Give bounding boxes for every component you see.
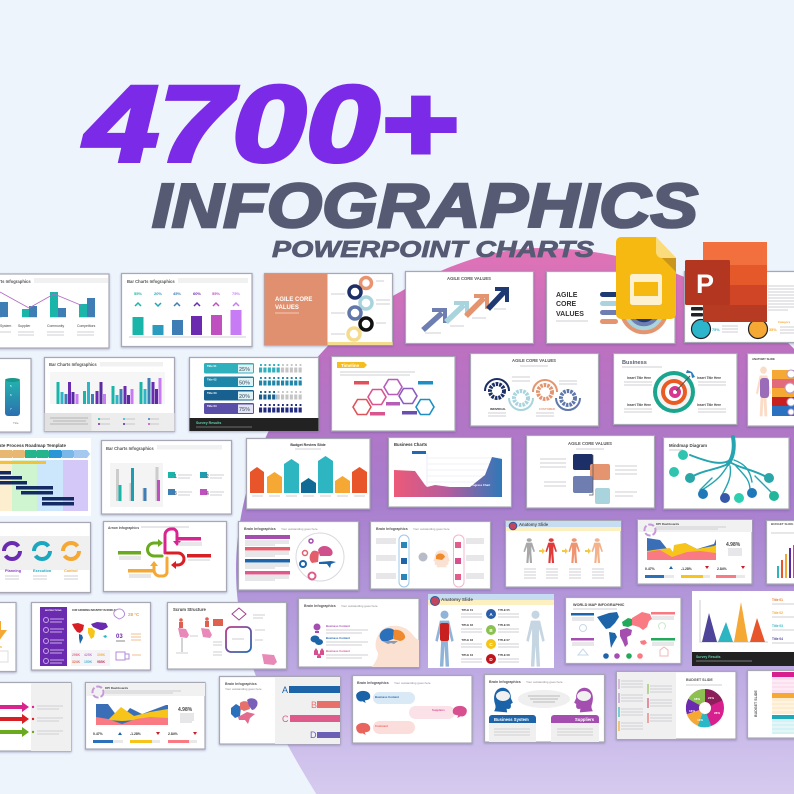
footer band <box>692 652 794 666</box>
card: survey results rows: 50% <box>239 380 250 386</box>
stats: 28 °C <box>128 612 140 617</box>
card: budget donut: 16% <box>689 709 695 713</box>
card: brain head: Brain Infographics <box>304 604 336 608</box>
card: brain A B C D: Your outstanding goes here <box>225 687 262 691</box>
backlogs <box>178 628 277 665</box>
numbered blocks <box>168 472 207 495</box>
card: mindmap <box>664 437 789 509</box>
card: KPI dashboard top <box>638 520 752 584</box>
footer legend <box>44 413 174 431</box>
card: bars with numbered blocks <box>102 440 232 514</box>
card: anatomy full: TITLE 01 <box>461 608 473 612</box>
card: arrow infographics: Arrow Infographics <box>108 526 139 530</box>
bars <box>58 378 160 404</box>
card: rising arrows: AGILE CORE VALUES <box>447 276 491 281</box>
card: KPI dashboard bottom: KPI Dashboards <box>105 686 129 690</box>
card: combo bar chart: Community <box>47 324 64 328</box>
card: target: Insert Title Here <box>697 376 721 380</box>
card: agile core values arcs <box>546 272 675 344</box>
card: brain A B C D: Brain Infographics <box>225 682 257 686</box>
people rows <box>259 365 304 410</box>
card: speech brains: Brain Infographics <box>357 681 389 685</box>
labels <box>354 381 433 416</box>
area chart <box>394 457 502 497</box>
hexagons <box>353 380 434 414</box>
card: agile core values arcs: VALUES <box>556 311 584 318</box>
speech ellipse <box>518 690 570 708</box>
card: target: Business <box>622 360 647 366</box>
brains <box>356 691 467 735</box>
donut <box>692 695 718 721</box>
card: cylinder: 7 <box>10 407 12 411</box>
title <box>83 63 698 262</box>
stats <box>116 612 140 640</box>
percent rows <box>204 363 254 414</box>
card: anatomy row: Anatomy Slide <box>519 522 549 527</box>
card: anatomy full: TITLE 04 <box>461 653 473 657</box>
card: bars with numbered blocks: 3 <box>174 491 177 497</box>
card: anatomy full: Anatomy Slide <box>441 597 473 602</box>
concentric arcs <box>622 310 666 332</box>
card: purple panel world stats: 324K <box>72 660 81 664</box>
card: scrum structure <box>168 602 286 669</box>
card: business area chart: Business Charts <box>394 442 428 447</box>
card: purple panel world stats: 296K <box>72 653 81 657</box>
card: budget donut: BUDGET SLIDE <box>686 678 713 682</box>
card: target: Insert Title Here <box>627 403 651 407</box>
card: connected blocks: AGILE CORE VALUES <box>568 441 612 446</box>
world map <box>72 622 108 644</box>
tree <box>690 437 772 495</box>
ring and brain <box>296 533 344 581</box>
card: KPI dashboard top: 4.98% <box>726 542 741 548</box>
card: survey results rows: Title 03 <box>207 391 217 395</box>
card: brain A B C D <box>220 676 340 744</box>
card: anatomy full: TITLE 06 <box>498 623 510 627</box>
card: agile core values rings: VALUES <box>275 305 299 311</box>
card: purple panel world stats: INSTRUCTIONS <box>45 610 62 612</box>
card: pie percent slide: 75% <box>712 328 720 332</box>
card: brain head: Business Content <box>326 649 350 653</box>
card: triangle survey chart <box>692 591 794 666</box>
side panel <box>40 607 67 666</box>
document bands <box>703 242 767 322</box>
card: purple panel world stats: OUR GROWING INDUSTRY IN WORLD <box>72 609 116 612</box>
card: two heads: Your outstanding goes here <box>413 527 450 531</box>
KPI stats <box>645 567 727 571</box>
card: anatomy full: TITLE 08 <box>498 653 510 657</box>
arrows <box>0 702 29 737</box>
card: anatomy full: D <box>489 657 493 662</box>
card: purple panel world stats: 985K <box>97 660 106 664</box>
card: cylinder: Title <box>13 421 19 425</box>
KPI stats: -1.28% <box>681 567 692 571</box>
letter P: P <box>696 269 714 299</box>
table <box>772 672 794 734</box>
card: budget donut: 11% <box>697 718 703 722</box>
card: orange arrow fragment <box>0 602 16 672</box>
card: world map infographic: WORLD MAP INFOGRAPHIC <box>573 603 625 607</box>
purple background blob <box>236 248 794 794</box>
card: arrow list <box>0 682 71 751</box>
vertical title: BUDGET SLIDE <box>754 690 758 717</box>
KPI stats: 2.84% <box>168 732 178 736</box>
card: target <box>614 354 737 424</box>
list bars <box>245 535 290 574</box>
KPI stats: 0.47% <box>93 732 103 736</box>
KPI stats: -1.28% <box>130 732 141 736</box>
card: connected blocks <box>526 436 654 508</box>
orange panel <box>264 274 328 345</box>
stacked area <box>647 538 716 560</box>
body left <box>435 611 454 667</box>
footer band <box>190 418 318 431</box>
bars <box>0 298 95 317</box>
task bars <box>0 471 74 506</box>
orange pie <box>748 320 768 338</box>
card: KPI dashboard bottom <box>86 682 205 749</box>
card: KPI dashboard top: KPI Dashboards <box>656 522 680 526</box>
headline word: INFOGRAPHICS <box>152 172 698 241</box>
rings <box>348 278 372 340</box>
bars <box>132 310 242 335</box>
card: business system suppliers: Your outstanding goes here <box>526 680 563 684</box>
card: brain A B C D: A <box>282 685 288 695</box>
lettered bars <box>289 686 340 738</box>
world map <box>597 612 652 648</box>
card: agile core values arcs: CORE <box>556 301 577 308</box>
card: survey results rows: Title 02 <box>207 378 217 382</box>
side labels <box>571 612 675 640</box>
card: brain head: Business Content <box>326 636 350 640</box>
card: survey results rows: Title 04 <box>207 404 217 408</box>
card: brain with list: Your outstanding goes here <box>281 527 318 531</box>
card: anatomy organs <box>748 354 794 426</box>
capsules <box>399 535 464 587</box>
card: gears: CUSTOMER <box>539 407 555 411</box>
card: timeline hexagons: Timeline <box>341 363 360 368</box>
chart bars <box>118 467 158 501</box>
card: world map infographic <box>566 598 681 664</box>
scrum loop <box>226 627 251 652</box>
card: scrum structure: Scrum Structure <box>173 607 206 612</box>
bodies <box>523 538 603 563</box>
card: purple panel world stats: 425K <box>84 653 93 657</box>
stacked area <box>96 704 168 725</box>
card: triangle survey chart: Title 03 <box>772 624 783 628</box>
arrows <box>539 548 591 554</box>
card: budget slide bars <box>766 520 794 584</box>
card: survey results rows: Title 01 <box>207 364 217 368</box>
card: bars with numbered blocks: 1 <box>174 474 177 480</box>
card: anatomy full: TITLE 05 <box>498 608 510 612</box>
card: six-bar percent chart: 55% <box>212 291 220 296</box>
card: survey results rows: 20% <box>239 394 250 400</box>
bars <box>778 545 794 578</box>
card: budget donut: 18% <box>694 697 700 701</box>
card: bars with numbered blocks: 4 <box>206 491 209 497</box>
card: survey results rows <box>190 358 318 431</box>
gears <box>485 379 580 410</box>
card: target: Insert Title Here <box>627 376 651 380</box>
card: brain A B C D: B <box>311 700 317 710</box>
card: business system suppliers: Suppliers <box>575 717 595 722</box>
head with brain <box>372 626 419 667</box>
card: combo bar chart: Competitors <box>77 324 96 328</box>
card: cycle arrows: Control <box>64 569 78 573</box>
card: purple panel world stats: 306K <box>97 653 106 657</box>
card: survey results rows: 75% <box>239 407 250 413</box>
card: anatomy row <box>506 520 621 587</box>
card: gears: AGILE CORE VALUES <box>512 358 556 363</box>
card: anatomy full: C <box>489 642 493 647</box>
pills <box>373 692 455 734</box>
tree nodes <box>669 450 779 503</box>
card: survey results rows: 25% <box>239 367 250 373</box>
stats: 03 <box>116 634 123 640</box>
card: triangle survey chart: Title 04 <box>772 637 783 641</box>
card: speech brains: Business Content <box>375 695 399 699</box>
card: six-bar percent chart: 45% <box>173 291 181 296</box>
teal bars <box>22 292 87 317</box>
triangles <box>702 602 765 642</box>
card: purple panel world stats: 150K <box>84 660 93 664</box>
icons <box>310 624 324 658</box>
subtitle: POWERPOINT CHARTS <box>272 236 595 262</box>
card: anatomy full: B <box>489 628 493 633</box>
card: anatomy organs: ANATOMY SLIDE <box>752 357 775 361</box>
category list <box>619 679 648 731</box>
legend circles <box>603 653 643 659</box>
number grid <box>71 650 110 666</box>
icon: PowerPoint <box>685 242 767 322</box>
slide symbol <box>630 274 662 305</box>
card: brain A B C D: D <box>310 730 317 740</box>
card: purple panel world stats <box>32 602 150 670</box>
teal pie <box>692 320 710 338</box>
card: triangle survey chart: Title 02 <box>772 611 783 615</box>
card: budget review: Budget Review Slide <box>290 443 326 447</box>
card: rising arrows <box>406 272 534 344</box>
card: anatomy full: A <box>489 612 493 617</box>
card: speech brains <box>352 676 472 743</box>
card: brain with list: Brain Infographics <box>244 527 276 531</box>
panels <box>489 715 599 742</box>
card: speech brains: Your outstanding goes here <box>394 681 431 685</box>
card: cycle arrows: Planning <box>5 569 22 573</box>
card: business system suppliers <box>484 674 604 742</box>
card: combo bar chart: System <box>0 324 11 328</box>
card: budget table <box>748 670 794 738</box>
card: six-bar percent chart: 20% <box>154 291 162 296</box>
card: triangle survey chart: Survey Results <box>696 655 721 659</box>
P tile <box>685 260 730 305</box>
card: business system suppliers: Brain Infographics <box>489 680 521 684</box>
KPI stats: 2.84% <box>717 567 727 571</box>
card: six-bar percent chart <box>122 274 252 346</box>
card: gears: INDIVIDUAL <box>490 407 506 411</box>
labels <box>118 537 211 572</box>
card: budget donut <box>616 672 736 739</box>
arrows <box>423 289 507 330</box>
card: six-bar percent chart: Bar Charts Infographics <box>127 279 175 284</box>
icon: Google Slides <box>616 237 676 319</box>
card: brain head <box>298 598 419 667</box>
card: target: Insert Title Here <box>697 403 721 407</box>
card: arrow infographics <box>104 522 226 592</box>
card: mindmap: Mindmap Diagram <box>669 443 707 448</box>
card: two heads <box>370 522 490 589</box>
card: brain with list <box>238 522 358 590</box>
card: KPI dashboard bottom: 4.98% <box>178 707 193 713</box>
brain <box>231 698 258 724</box>
card: grouped bar chart: Bar Charts Infographics <box>49 362 97 367</box>
arrow bars <box>250 456 367 493</box>
card: combo bar chart: Supplier <box>18 324 31 328</box>
card: business area chart <box>388 438 512 507</box>
card: combo bar chart <box>0 274 109 348</box>
card: grouped bar chart <box>44 358 174 431</box>
card: bars with numbered blocks: Bar Charts Infographics <box>106 446 154 451</box>
card: budget slide bars: BUDGET SLIDE <box>771 522 793 526</box>
card: budget donut: 26% <box>714 711 720 715</box>
card: business area chart: Progress Chart <box>470 483 490 487</box>
arrow pills <box>600 292 618 324</box>
card: gears <box>470 354 598 426</box>
card: anatomy full: TITLE 03 <box>461 638 473 642</box>
card: orange arrow fragment: s <box>0 645 2 649</box>
looping arrows <box>148 529 184 576</box>
card: two heads: Brain Infographics <box>376 527 408 531</box>
card: brain head: Business Content <box>326 624 350 628</box>
columns <box>0 460 88 511</box>
card: six-bar percent chart: 60% <box>193 291 201 296</box>
letter circles <box>486 609 496 664</box>
heads <box>418 550 450 567</box>
card: business system suppliers: Business System <box>494 717 529 722</box>
card: cycle arrows <box>0 522 90 592</box>
card: brain A B C D: C <box>282 714 289 724</box>
chevrons <box>0 450 90 458</box>
card: timeline hexagons <box>332 356 455 431</box>
card: budget review <box>246 438 370 509</box>
card: anatomy full <box>428 594 554 668</box>
card: cycle arrows: Execution <box>33 569 52 573</box>
card: agile core values rings: AGILE CORE <box>275 297 312 303</box>
card: cylinder <box>0 358 31 432</box>
card: agile core values arcs: AGILE <box>556 292 578 299</box>
people icons <box>179 617 223 628</box>
card: pie percent slide <box>684 272 794 342</box>
card: speech brains: Comment <box>375 724 388 728</box>
card: survey results rows: Survey Results <box>196 421 221 425</box>
card: cylinder: 5 <box>10 384 12 388</box>
card: pie percent slide: Category <box>778 320 791 324</box>
heads <box>494 688 593 712</box>
card: brain head: Your outstanding goes here <box>341 604 378 608</box>
headline number: 4700+ <box>83 63 457 184</box>
card: process roadmap <box>0 438 91 516</box>
card: pie percent slide: 35% <box>769 328 777 332</box>
card: budget donut: 21% <box>708 696 714 700</box>
card: cylinder: 6 <box>10 393 12 397</box>
card: triangle survey chart: Title 01 <box>772 598 783 602</box>
cycle icons <box>4 543 79 559</box>
card: agile core values rings <box>264 274 392 345</box>
card: anatomy full: TITLE 07 <box>498 638 510 642</box>
card: six-bar percent chart: 75% <box>232 291 240 296</box>
card: six-bar percent chart: 55% <box>134 291 142 296</box>
stacked steps <box>772 370 794 416</box>
card: anatomy full: TITLE 02 <box>461 623 473 627</box>
card: bars with numbered blocks: 2 <box>206 474 209 480</box>
target icon <box>653 370 695 413</box>
KPI stats: 0.47% <box>645 567 655 571</box>
card: speech brains: Suppliers <box>432 708 445 712</box>
body right <box>526 611 545 667</box>
KPI stats <box>93 732 178 736</box>
blocks <box>573 454 610 504</box>
